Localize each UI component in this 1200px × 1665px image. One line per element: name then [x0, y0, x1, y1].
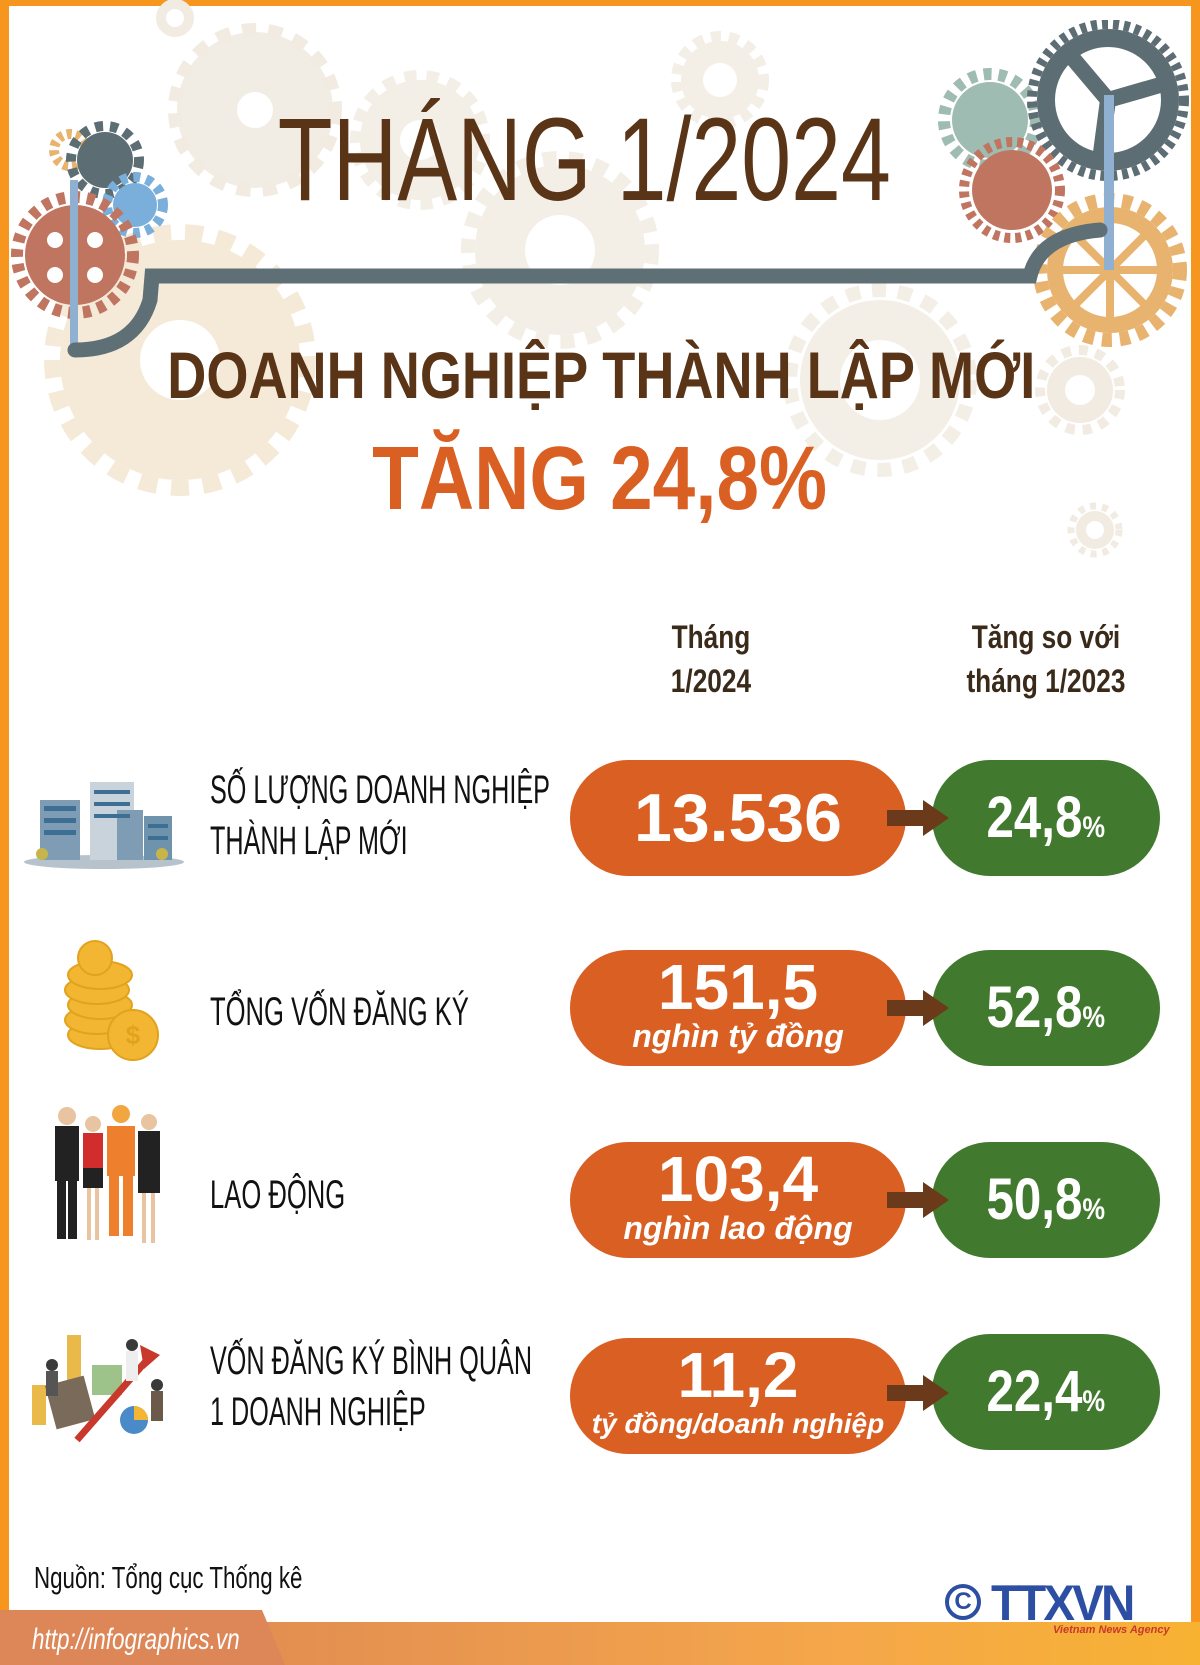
- arrow: [887, 800, 949, 836]
- value pill: [570, 760, 906, 876]
- value pill: [570, 950, 906, 1066]
- row 1: [24, 760, 1160, 876]
- connecting bar: [68, 222, 1108, 358]
- value pill: 103,4: [658, 1143, 818, 1215]
- value pill: nghìn lao động: [623, 1210, 853, 1246]
- label: [210, 1338, 532, 1434]
- label: 1 DOANH NGHIỆP: [210, 1390, 426, 1434]
- icon: coins: $: [126, 1020, 141, 1050]
- growth pill: 22,4%: [987, 1359, 1105, 1424]
- column header: month: 1/2024: [671, 663, 751, 699]
- row 4: [32, 1334, 1160, 1454]
- growth pill: 50,8%: [987, 1167, 1105, 1232]
- arrow: [887, 1375, 949, 1411]
- logo: TTXVN: [945, 1575, 1170, 1636]
- row 3: [55, 1105, 1160, 1258]
- icon: workers: [55, 1105, 160, 1243]
- growth pill: [932, 1142, 1160, 1258]
- background gears: [44, 0, 1125, 558]
- growth pill: [932, 760, 1160, 876]
- source note: Nguồn: Tổng cục Thống kê: [34, 1560, 302, 1595]
- icon: coins: [64, 940, 159, 1061]
- footer url tab: [0, 1610, 285, 1665]
- arrow: [887, 990, 949, 1026]
- value pill: 13.536: [634, 780, 842, 856]
- icon: buildings: [24, 782, 184, 869]
- column header: month: Tháng: [672, 619, 750, 655]
- subtitle: DOANH NGHIỆP THÀNH LẬP MỚI: [167, 338, 1035, 412]
- logo: TTXVN: C: [954, 1588, 972, 1615]
- icon: business finance: [32, 1335, 163, 1442]
- title: THÁNG 1/2024: [277, 94, 891, 226]
- column header: growth: tháng 1/2023: [967, 663, 1125, 699]
- label: [210, 767, 550, 863]
- left gear machine: [11, 121, 168, 344]
- growth pill: 24,8%: [987, 785, 1105, 850]
- value pill: 151,5: [658, 951, 818, 1023]
- column header: month: [671, 619, 751, 699]
- value pill: 11,2: [677, 1339, 799, 1411]
- footer url: http://infographics.vn: [32, 1623, 240, 1656]
- value pill: tỷ đồng/doanh nghiệp: [592, 1408, 884, 1439]
- value pill: nghìn tỷ đồng: [632, 1018, 844, 1054]
- logo: TTXVN: TTXVN: [991, 1575, 1132, 1631]
- value pill: [570, 1142, 906, 1258]
- label: SỐ LƯỢNG DOANH NGHIỆP: [210, 768, 550, 812]
- headline: TĂNG 24,8%: [373, 429, 827, 529]
- right gear machine: [938, 20, 1189, 347]
- footer strip: [0, 1622, 1200, 1665]
- value pill: [570, 1338, 906, 1454]
- label: LAO ĐỘNG: [210, 1173, 345, 1217]
- growth pill: [932, 1334, 1160, 1450]
- growth pill: 52,8%: [987, 975, 1105, 1040]
- column header: growth: Tăng so với: [972, 619, 1120, 655]
- logo: TTXVN: Vietnam News Agency: [1053, 1624, 1170, 1636]
- label: TỔNG VỐN ĐĂNG KÝ: [210, 990, 469, 1034]
- column header: growth: [966, 619, 1125, 699]
- growth pill: [932, 950, 1160, 1066]
- label: VỐN ĐĂNG KÝ BÌNH QUÂN: [210, 1339, 532, 1383]
- label: THÀNH LẬP MỚI: [210, 819, 408, 863]
- arrow: [887, 1182, 949, 1218]
- row 2: [64, 940, 1160, 1066]
